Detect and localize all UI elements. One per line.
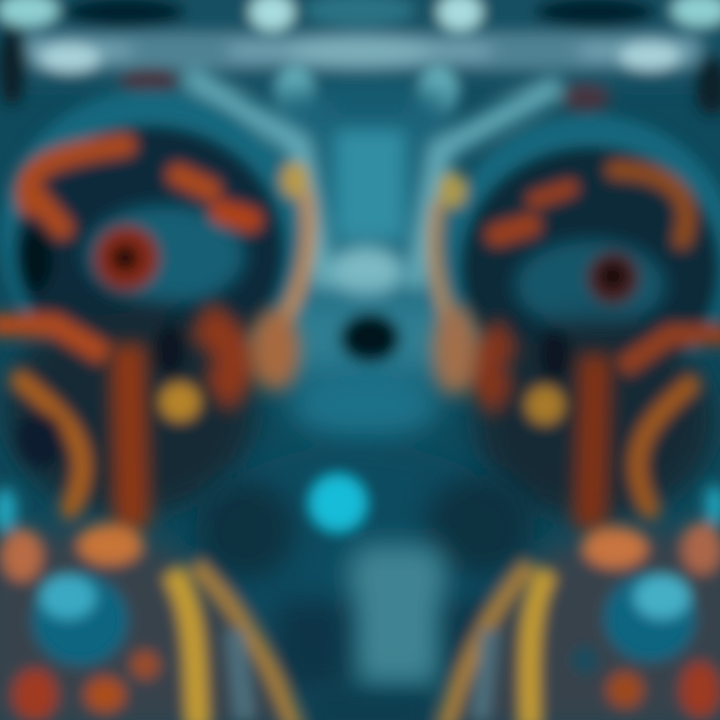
central torso	[195, 445, 535, 720]
background: dark top band and light lattice	[0, 0, 720, 116]
right neck and veins	[433, 305, 720, 530]
right shoulder	[435, 485, 720, 720]
eye	[95, 226, 159, 290]
eye	[587, 252, 639, 304]
cheek highlights	[265, 162, 466, 350]
orange brain patches	[27, 145, 250, 228]
center column	[185, 75, 560, 440]
orange brain patches	[497, 170, 686, 240]
left neck and veins	[0, 305, 299, 530]
left shoulder	[0, 488, 300, 720]
left head	[0, 90, 300, 380]
right head	[445, 115, 720, 395]
